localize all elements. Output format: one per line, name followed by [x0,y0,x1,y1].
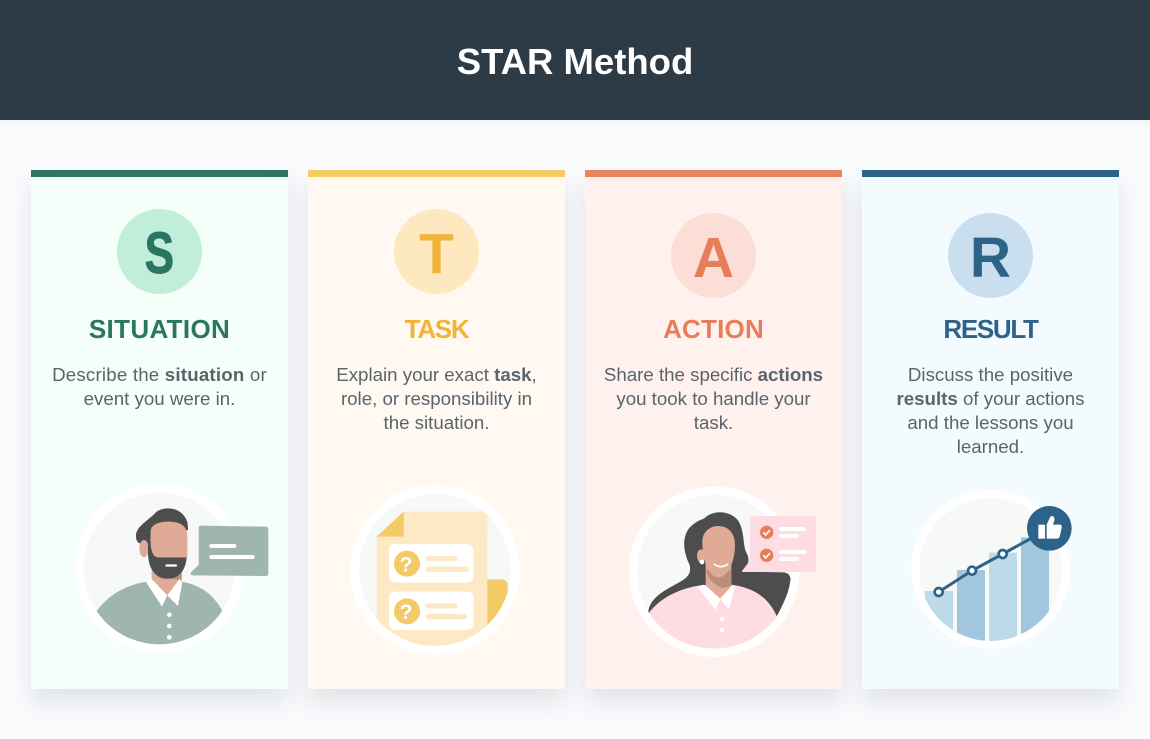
text: result: results of your actions [896,388,1085,409]
top bar: result [862,170,1119,177]
letter badge S [117,209,202,294]
text: situation: event you were in. [84,388,235,409]
text: task: Explain your exact task, [336,364,537,385]
text: task: role, or responsibility in [341,388,532,409]
text: task: the situation. [384,412,489,433]
header band [0,0,1150,120]
heading: action: ACTION [663,314,764,344]
letter badge R [948,213,1033,298]
letter badge T [394,209,479,294]
icon: question document: ? [399,552,413,576]
text: situation [52,364,267,409]
text: situation: Describe the situation or [52,364,267,385]
text: result [896,364,1085,457]
top bar: action [585,170,842,177]
icon: question document [355,490,515,657]
heading: task: TASK [405,314,468,344]
letter badge R: R [970,226,1011,290]
text: result: learned. [957,436,1024,457]
panel: situation [31,170,288,689]
icon: man with speech bubble [79,488,268,650]
letter badge A: A [693,226,734,290]
title: STAR Method [457,41,693,82]
heading: situation: SITUATION [89,314,230,344]
top bar: situation [31,170,288,177]
text: result: Discuss the positive [908,364,1073,385]
text: result: and the lessons you [907,412,1074,433]
text: action: you took to handle your [616,388,811,409]
panel: task [308,170,565,689]
icon: question document: ? [399,600,413,624]
letter badge T: T [419,222,454,286]
panel: result [862,170,1119,689]
text: action: task. [694,412,733,433]
letter badge A [671,213,756,298]
text: action: Share the specific actions [604,364,823,385]
text: task [336,364,537,433]
icon: woman with checklist [633,491,816,657]
top bar: task [308,170,565,177]
letter badge S: S [145,221,174,286]
heading: result: RESULT [943,314,1038,344]
icon: growth chart with thumbs up [915,494,1072,658]
panel: action [585,170,842,689]
text: action [604,364,823,433]
